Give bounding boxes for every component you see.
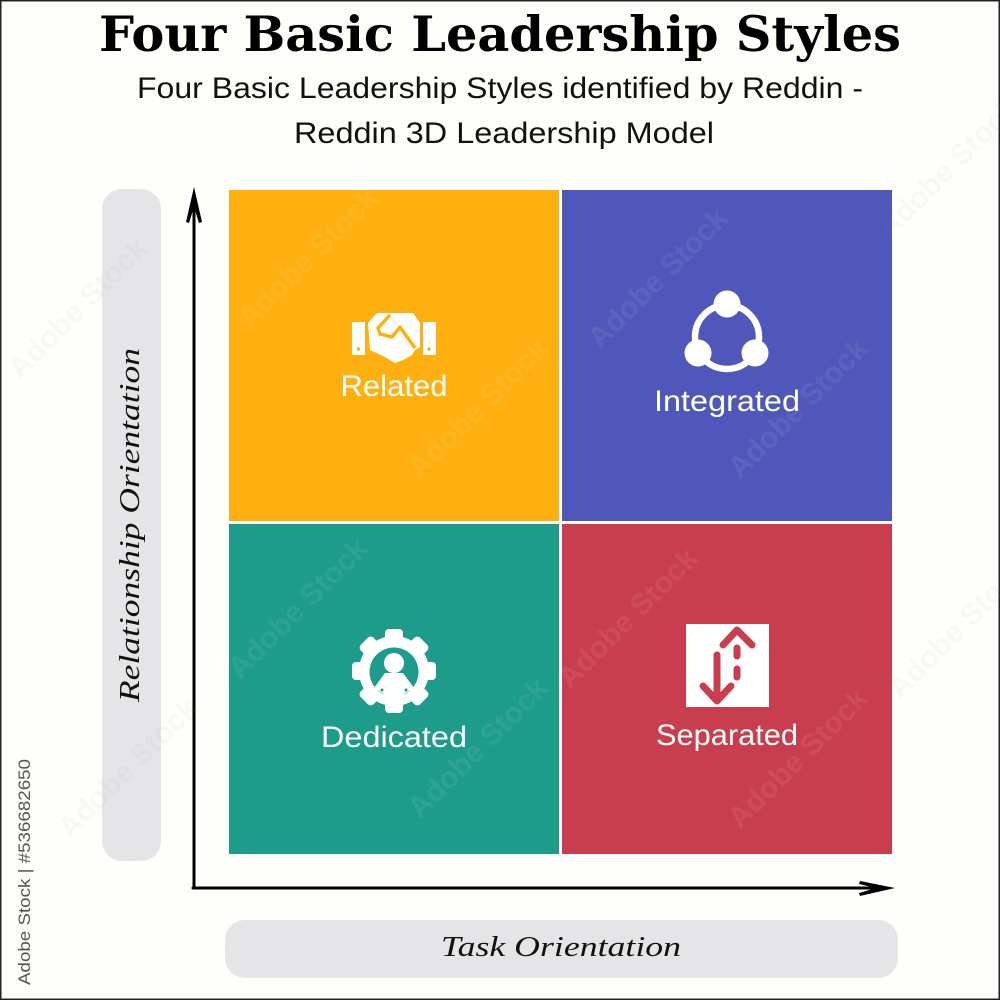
text: Adobe Stock xyxy=(552,542,705,695)
icon: three connected nodes xyxy=(684,290,768,369)
text: Adobe Stock xyxy=(232,182,385,335)
panel: Dedicated xyxy=(229,524,559,854)
x axis label pill xyxy=(225,920,898,978)
label: Separated: Separated xyxy=(656,719,798,752)
text: Adobe Stock xyxy=(402,332,555,485)
text: Adobe Stock xyxy=(222,532,375,685)
text: Adobe Stock xyxy=(2,232,155,385)
label: Related: Related xyxy=(340,370,448,403)
icon: gear with person xyxy=(352,629,436,713)
x axis label pill: Task Orientation xyxy=(441,931,681,963)
horizontal axis arrow xyxy=(193,881,895,896)
subtitle xyxy=(137,72,863,150)
text: Adobe Stock xyxy=(722,682,875,835)
label: Integrated: Integrated xyxy=(654,385,800,418)
label: Dedicated: Dedicated xyxy=(321,721,467,754)
panel: Separated xyxy=(562,524,892,854)
text: Adobe Stock xyxy=(582,202,735,355)
title: Four Basic Leadership Styles xyxy=(99,5,901,63)
subtitle: Reddin 3D Leadership Model xyxy=(294,117,714,150)
subtitle: Four Basic Leadership Styles identified by Reddin - xyxy=(137,72,863,105)
icon: handshake xyxy=(352,313,436,363)
text: Adobe Stock xyxy=(402,672,555,825)
y axis label pill xyxy=(102,189,161,861)
vertical axis arrow xyxy=(186,187,202,888)
panel: Integrated xyxy=(562,190,892,521)
stock credit: Adobe Stock | #536682650 xyxy=(15,759,34,985)
icon: up and down arrows xyxy=(686,624,769,707)
panel: Related xyxy=(229,190,559,521)
text: Adobe Stock xyxy=(722,332,875,485)
text: Adobe Stock xyxy=(52,692,205,845)
y axis label pill: Relationship Orientation xyxy=(114,348,146,703)
